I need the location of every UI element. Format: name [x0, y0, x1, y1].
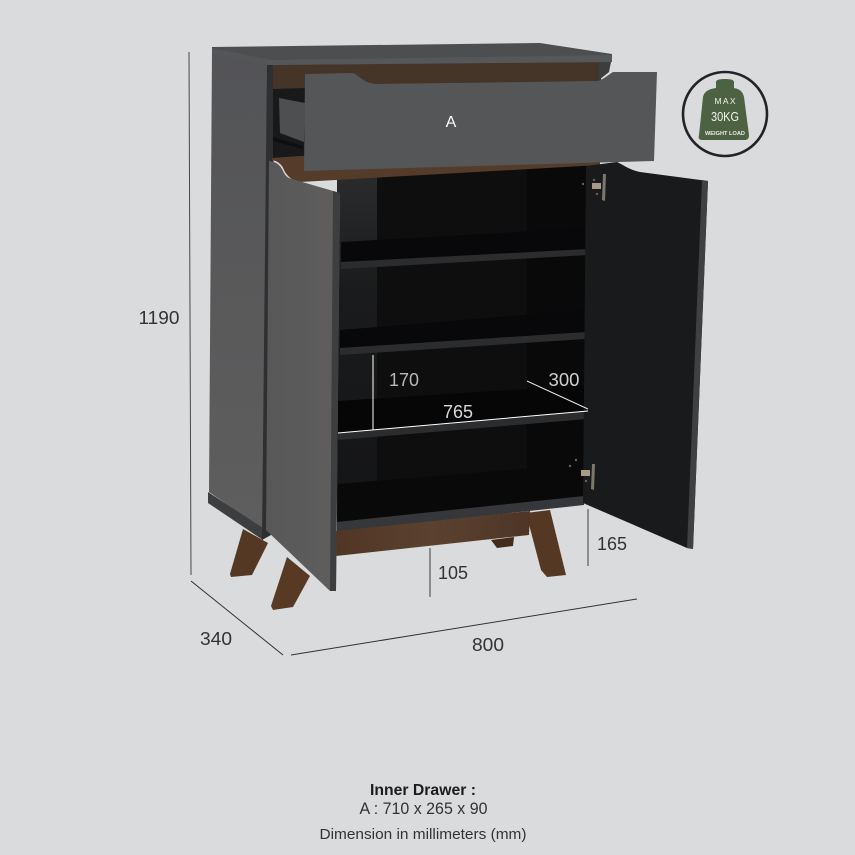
- cabinet illustration: [208, 43, 708, 610]
- dimension: shelf width 765: [338, 401, 588, 433]
- interior right wall: [527, 164, 590, 500]
- shelf floors: [341, 228, 588, 263]
- dimension: leg height 165: [588, 509, 627, 566]
- left door edge: [330, 191, 340, 591]
- badge ring: [683, 72, 767, 156]
- badge text max: MAX: [714, 96, 736, 106]
- drawer size: A : 710 x 265 x 90: [360, 800, 488, 818]
- dimension: height 1190: 1190: [138, 307, 180, 328]
- tabletop side edge: [212, 48, 267, 65]
- note heading: Inner Drawer :: [370, 782, 476, 799]
- left front leg: [271, 557, 310, 610]
- dimension: shelf height 170: [373, 355, 419, 430]
- cabinet side panel: [209, 50, 268, 530]
- units note: Dimension in millimeters (mm): [320, 827, 526, 843]
- right door: [583, 162, 708, 549]
- right frame post: [599, 62, 611, 80]
- bottom hinge: [569, 459, 595, 490]
- left rear leg: [230, 529, 268, 577]
- dimension: shelf depth 300: [527, 369, 588, 409]
- cabinet interior: [337, 160, 600, 526]
- dimension: shelf height 170: 170: [389, 369, 419, 390]
- drawer front: [304, 72, 657, 171]
- upper wood shelf under drawer: [272, 150, 600, 182]
- dimension: base clearance 105: [430, 548, 468, 597]
- shelf 2: [340, 332, 586, 355]
- right door edge: [687, 180, 708, 549]
- tabletop: [212, 43, 612, 65]
- dimension: shelf width 765: 765: [443, 401, 473, 422]
- upper wood rail: [273, 58, 601, 90]
- drawer opening: [273, 88, 306, 160]
- front frame strip: [262, 62, 275, 540]
- dimension: shelf depth 300: 300: [548, 369, 580, 390]
- badge text weight load: WEIGHT LOAD: [705, 131, 745, 137]
- weight load badge: [683, 72, 767, 156]
- right front leg: [526, 510, 566, 577]
- side plinth: [208, 492, 263, 540]
- base wood rail: [336, 511, 530, 556]
- dimension: base clearance 105: 105: [438, 562, 468, 583]
- shelf 1: [341, 249, 588, 269]
- interior left wall: [337, 174, 377, 510]
- dimension: depth 340: 340: [200, 628, 232, 649]
- dimension: leg height 165: 165: [597, 533, 627, 554]
- weight icon: [699, 79, 749, 140]
- inner drawer notes: [320, 782, 526, 843]
- shelf 3: [338, 411, 588, 440]
- badge text 30kg: 30KG: [711, 110, 739, 124]
- bottom panel: [337, 496, 584, 532]
- drawer inner side: [279, 98, 305, 142]
- top hinge: [582, 174, 606, 201]
- dimension: width 800: [291, 599, 637, 655]
- left door: [266, 161, 340, 591]
- dimension: width 800: 800: [472, 634, 504, 655]
- drawer label: A: [446, 114, 457, 131]
- dimension: depth 340: [191, 581, 283, 655]
- tabletop front edge: [267, 55, 612, 65]
- drawer runner: [273, 137, 303, 149]
- back leg: [491, 537, 514, 548]
